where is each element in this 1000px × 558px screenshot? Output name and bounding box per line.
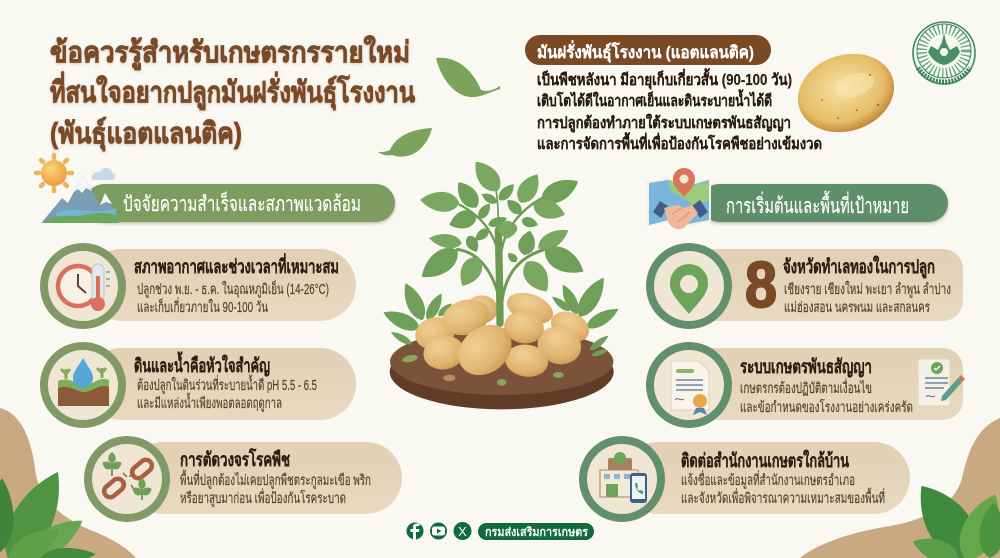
icon: sun bbox=[36, 155, 72, 191]
plant stems bbox=[457, 190, 545, 323]
icon: clock and thermometer bbox=[40, 243, 126, 329]
back potatoes bbox=[466, 287, 594, 348]
footer: social icons and department name bbox=[406, 522, 594, 540]
big number: 8 bbox=[745, 248, 777, 321]
card body bbox=[784, 280, 951, 316]
icon: facebook bbox=[406, 522, 424, 540]
icon: X bbox=[454, 522, 472, 540]
card body: หรือยาสูบมาก่อน เพื่อป้องกันโรคระบาด bbox=[180, 488, 346, 507]
icon: location pin bbox=[646, 243, 732, 329]
card body: และจังหวัดเพื่อพิจารณาความเหมาะสมของพื้นที่ bbox=[681, 487, 885, 507]
intro text block bbox=[537, 68, 822, 153]
grass tufts bbox=[380, 273, 622, 358]
department name: กรมส่งเสริมการเกษตร bbox=[485, 525, 588, 539]
title: ที่สนใจอยากปลูกมันฝรั่งพันธุ์โรงงาน bbox=[50, 71, 415, 110]
card heading: จังหวัดทำเลทองในการปลูก bbox=[783, 255, 935, 279]
icon: certificate bbox=[646, 342, 732, 428]
card body bbox=[740, 378, 913, 416]
icon: map and handshake bbox=[646, 168, 711, 229]
icon: X: X bbox=[458, 524, 467, 539]
icon: potato bbox=[788, 42, 904, 144]
icon: signed document bbox=[918, 359, 965, 406]
icon: cloud bbox=[92, 168, 115, 180]
intro heading pill bbox=[525, 35, 771, 65]
section header: getting started bbox=[646, 168, 948, 229]
card: weather and timing bbox=[40, 243, 356, 329]
card: contract farming bbox=[646, 342, 965, 428]
card body: และข้อกำหนดของโรงงานอย่างเคร่งครัด bbox=[740, 398, 913, 416]
intro text block: เป็นพืชหลังนา มีอายุเก็บเกี่ยวสั้น (90-100 วัน) bbox=[537, 68, 792, 90]
card body bbox=[681, 470, 885, 507]
plant with potatoes on soil bbox=[380, 156, 622, 409]
title bbox=[50, 35, 415, 151]
card background bbox=[85, 249, 356, 321]
card body: แม่ฮ่องสอน นครพนม และสกลนคร bbox=[784, 300, 930, 316]
decoration: bottom-right soil and leaves bbox=[800, 418, 1000, 558]
card heading: การตัดวงจรโรคพืช bbox=[180, 448, 290, 471]
header pill bbox=[85, 184, 395, 222]
icon: office and phone bbox=[579, 436, 665, 522]
plant leaves bbox=[415, 156, 589, 298]
card background bbox=[689, 348, 963, 420]
logo: department seal bbox=[913, 22, 975, 84]
card: soil and water bbox=[40, 342, 356, 428]
intro text block: เติบโตได้ดีในอากาศเย็นและดินระบายน้ำได้ดี bbox=[537, 89, 772, 110]
card body: พื้นที่ปลูกต้องไม่เคยปลูกพืชตระกูลมะเขือ พริก bbox=[180, 469, 371, 489]
card heading: ดินและน้ำคือหัวใจสำคัญ bbox=[134, 351, 270, 377]
card body bbox=[137, 374, 317, 412]
title: (พันธุ์แอตแลนติค) bbox=[50, 116, 242, 151]
icon: youtube bbox=[430, 522, 447, 540]
card background bbox=[85, 348, 356, 420]
icon: floating leaf lower bbox=[378, 128, 432, 157]
icon: floating leaf top bbox=[436, 58, 500, 97]
soil mound bbox=[390, 328, 614, 409]
card body: แจ้งชื่อและข้อมูลที่สำนักงานเกษตรอำเภอ bbox=[681, 470, 855, 489]
section header: success factors bbox=[36, 155, 395, 223]
header pill bbox=[700, 184, 948, 222]
icon: broken chain and seedlings bbox=[84, 436, 170, 522]
card body: และมีแหล่งน้ำเพียงพอตลอดฤดูกาล bbox=[137, 392, 282, 412]
card: eight provinces bbox=[646, 243, 963, 329]
decoration: bottom-left soil and leaves bbox=[0, 408, 136, 558]
icon: soil and water drop bbox=[40, 342, 126, 428]
card background bbox=[622, 442, 910, 514]
card heading: สภาพอากาศและช่วงเวลาที่เหมาะสม bbox=[134, 253, 339, 278]
card background bbox=[689, 249, 963, 321]
card body bbox=[137, 279, 329, 316]
pebbles bbox=[401, 354, 564, 386]
header text: การเริ่มต้นและพื้นที่เป้าหมาย bbox=[726, 191, 909, 218]
intro text block: และการจัดการพื้นที่เพื่อป้องกันโรคพืชอย่างเข้มงวด bbox=[537, 132, 822, 153]
card body: เกษตรกรต้องปฏิบัติตามเงื่อนไข bbox=[740, 378, 872, 397]
card heading: ระบบเกษตรพันธสัญญา bbox=[740, 357, 872, 378]
department pill bbox=[478, 523, 594, 540]
card body: ปลูกช่วง พ.ย. - ธ.ค. ในอุณหภูมิเย็น (14-26°C) bbox=[137, 279, 329, 298]
card heading: ติดต่อสำนักงานเกษตรใกล้บ้าน bbox=[681, 449, 849, 472]
header text: ปัจจัยความสำเร็จและสภาพแวดล้อม bbox=[123, 190, 361, 216]
card body bbox=[180, 469, 371, 507]
card: contact local office bbox=[579, 436, 910, 522]
title: ข้อควรรู้สำหรับเกษตรกรรายใหม่ bbox=[50, 35, 410, 70]
intro heading pill: มันฝรั่งพันธุ์โรงงาน (แอตแลนติค) bbox=[537, 40, 754, 63]
icon: mountains bbox=[42, 175, 119, 223]
card: breaking the disease cycle bbox=[84, 436, 402, 522]
intro text block: การปลูกต้องทำภายใต้ระบบเกษตรพันธสัญญา bbox=[537, 113, 791, 134]
card body: และเก็บเกี่ยวภายใน 90-100 วัน bbox=[137, 297, 268, 316]
card body: ต้องปลูกในดินร่วนที่ระบายน้ำดี pH 5.5 - 6.5 bbox=[137, 374, 317, 394]
front potatoes bbox=[412, 294, 585, 386]
card background bbox=[127, 442, 402, 514]
